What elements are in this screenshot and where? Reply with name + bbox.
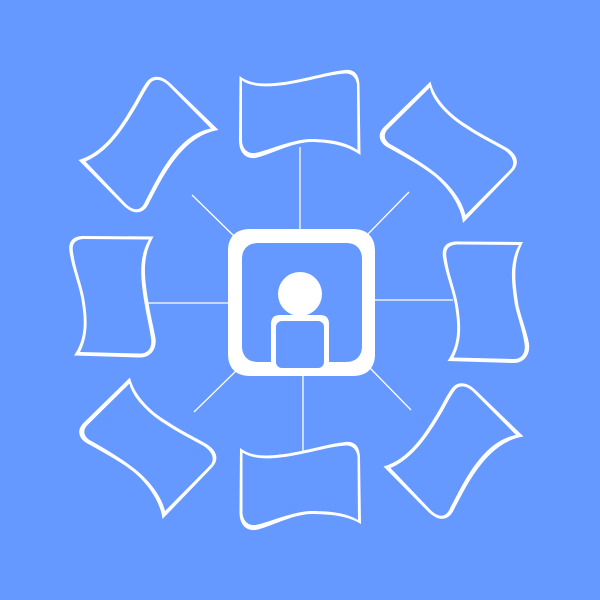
connector lines	[147, 147, 453, 452]
card: bottom	[240, 442, 361, 530]
card: top right	[380, 82, 517, 223]
central frame	[228, 229, 375, 376]
card: top	[239, 70, 360, 158]
icon: person	[271, 272, 329, 368]
card: top left	[78, 77, 218, 212]
card: right	[443, 242, 529, 363]
card: bottom right	[384, 383, 524, 519]
card: bottom left	[79, 378, 216, 519]
card: left	[69, 236, 156, 358]
